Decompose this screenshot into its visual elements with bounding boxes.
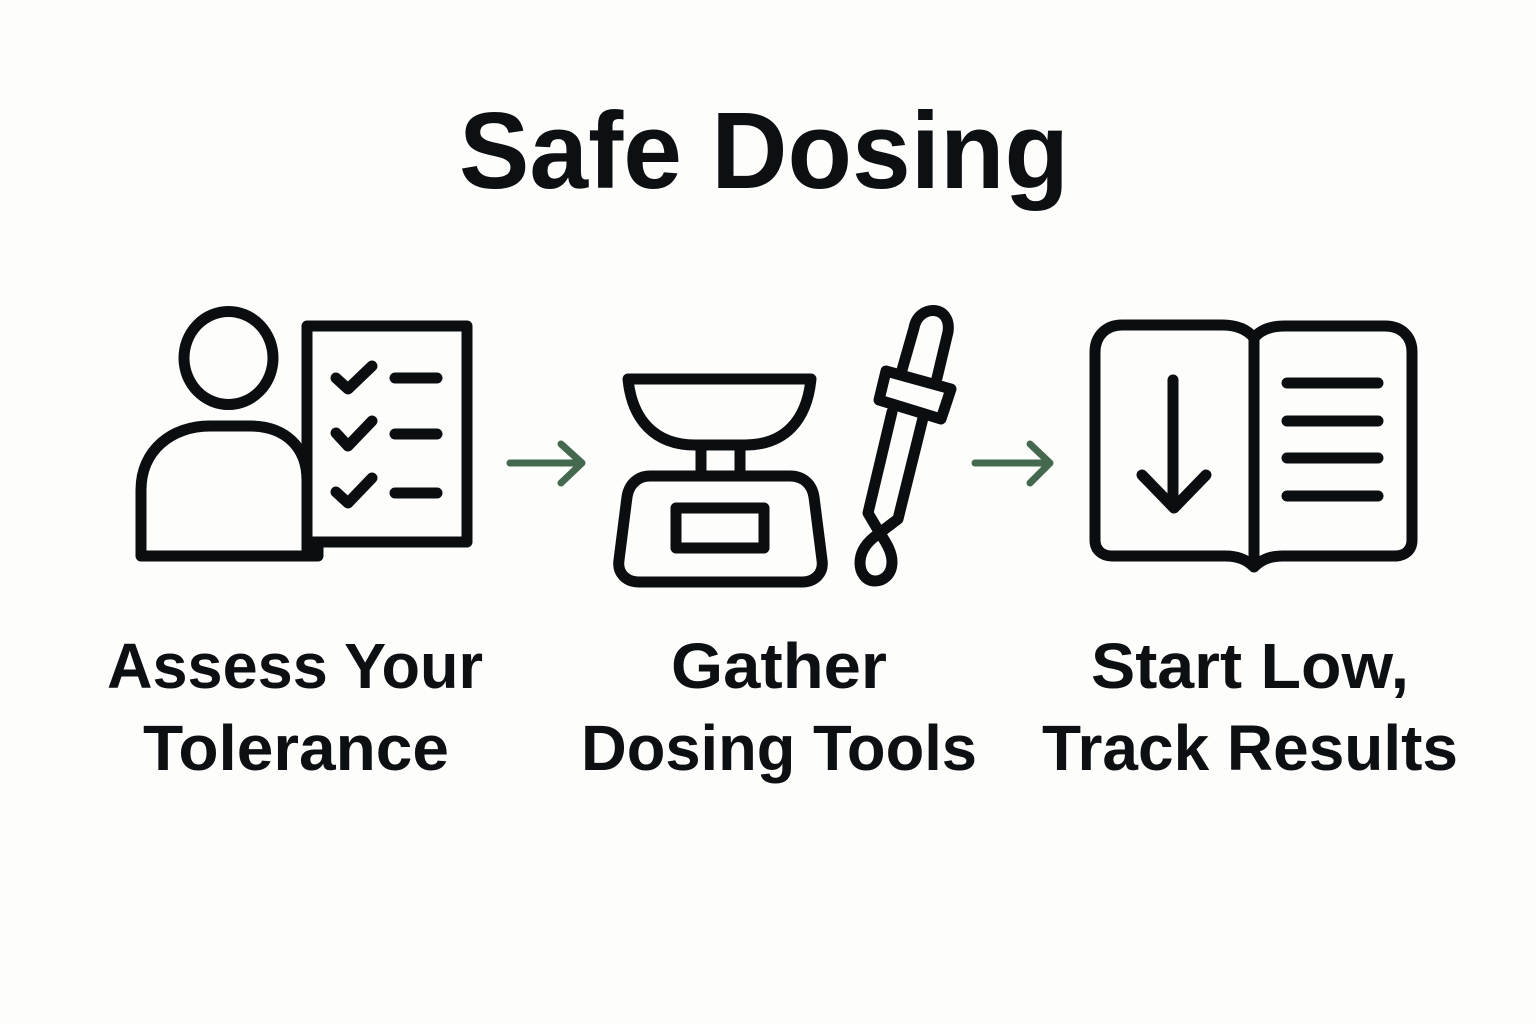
- label: assess your tolerance: [107, 630, 483, 784]
- icon: scale and dropper: [619, 310, 951, 582]
- title: Safe Dosing: [459, 90, 1069, 212]
- label: start low, track results: Start Low,: [1091, 630, 1409, 702]
- icon: open book with down arrow: [1095, 325, 1412, 567]
- label: gather dosing tools: Dosing Tools: [581, 712, 977, 784]
- arrow: step two to three: [975, 444, 1050, 483]
- label: start low, track results: [1042, 630, 1458, 784]
- label: assess your tolerance: Tolerance: [143, 712, 449, 784]
- label: gather dosing tools: [581, 630, 977, 784]
- label: start low, track results: Track Results: [1042, 712, 1458, 784]
- label: gather dosing tools: Gather: [671, 630, 887, 702]
- icon: person with checklist: [141, 312, 467, 556]
- arrow: step one to two: [510, 444, 582, 483]
- label: assess your tolerance: Assess Your: [107, 630, 483, 702]
